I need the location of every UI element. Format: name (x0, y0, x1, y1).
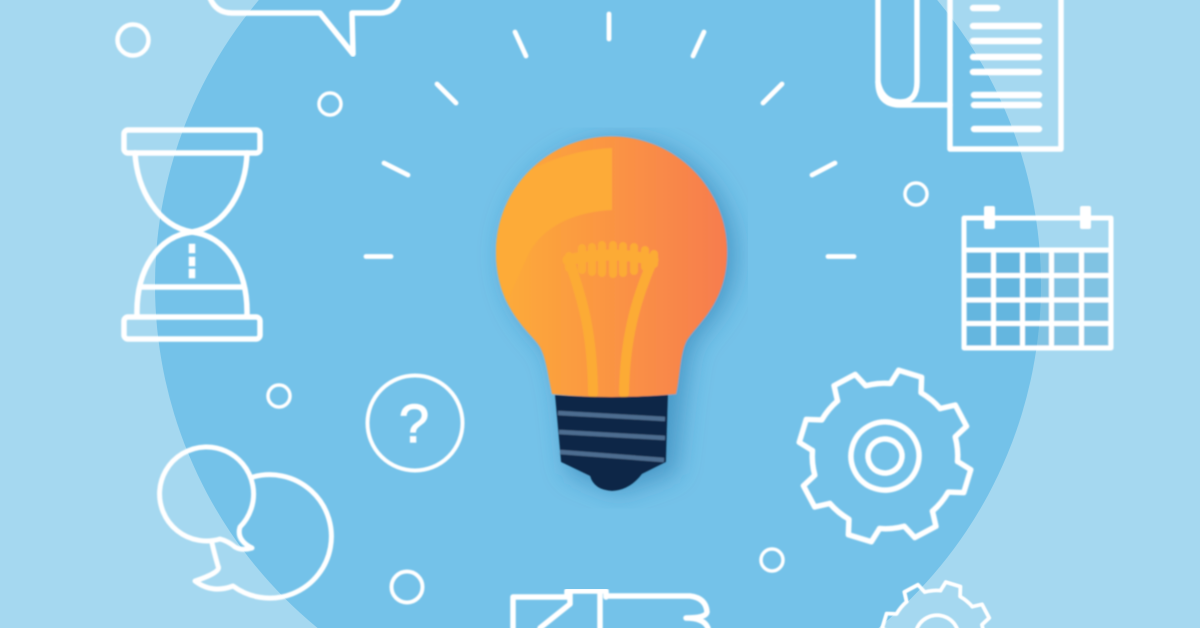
bulb highlight (496, 148, 612, 300)
icon: light bulb (480, 136, 735, 493)
icon: calendar (964, 206, 1111, 348)
icon: question mark in circle (368, 376, 462, 470)
icon: question mark in circle: ? (399, 394, 429, 454)
background circle (155, 0, 1041, 628)
icon: speech bubble top (210, 0, 399, 54)
bulb shadow (504, 140, 735, 493)
bulb glass (496, 136, 727, 397)
base threads (558, 413, 665, 460)
icon: chat bubbles (160, 447, 331, 598)
decorative small circles (118, 24, 927, 602)
icon: hourglass (124, 130, 260, 339)
screw base (555, 395, 668, 491)
icon: document and scroll (878, 0, 1061, 149)
icon: small gear (866, 566, 1008, 628)
light rays around the bulb (366, 14, 854, 256)
icon: open book at the bottom (513, 591, 708, 628)
filament (568, 245, 654, 393)
icon: large gear (775, 346, 995, 566)
